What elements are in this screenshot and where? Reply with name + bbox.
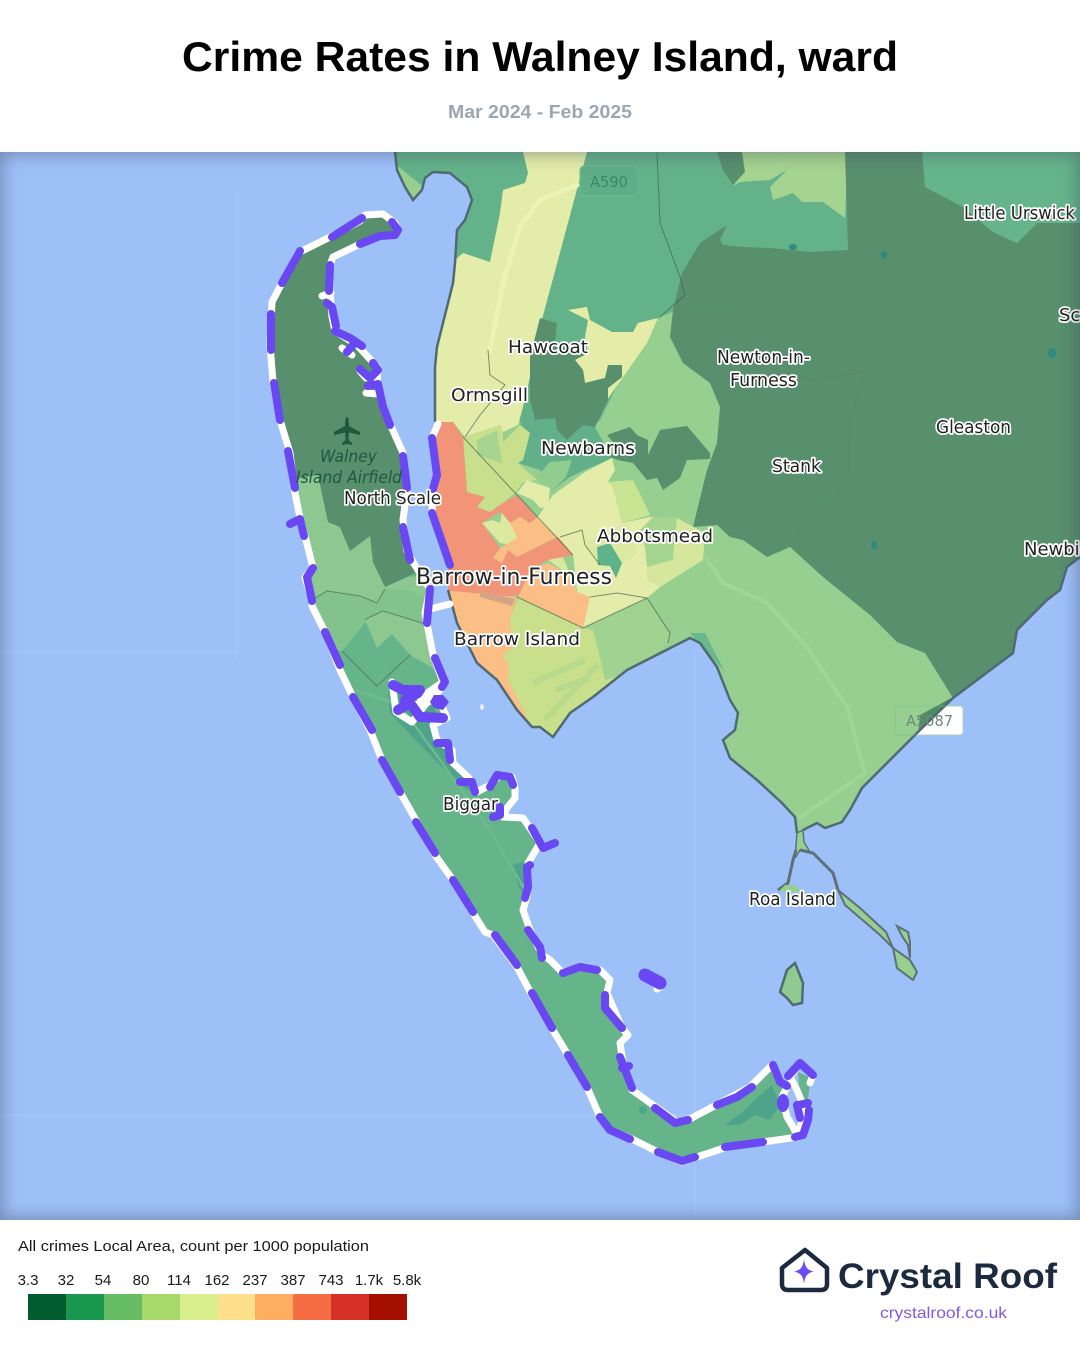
area: Hawcoat yellow xyxy=(568,307,658,400)
area: teal patch xyxy=(597,543,622,578)
logo icon: house with star xyxy=(782,1250,827,1290)
area: Hawcoat dark xyxy=(530,318,622,440)
title block xyxy=(182,33,898,122)
place labels: Ormsgill xyxy=(451,385,528,406)
place labels: Furness xyxy=(730,370,797,391)
ward lines inside Walney xyxy=(312,589,425,686)
small island north of Roanhead tip xyxy=(798,1072,811,1112)
footer xyxy=(18,1238,1058,1322)
Walney Island ward fill xyxy=(274,218,792,1156)
white dot in the channel xyxy=(480,704,484,710)
area: Rampside and south east xyxy=(398,166,1037,832)
teal shore patch xyxy=(690,633,725,672)
area: top right green xyxy=(920,152,1080,243)
place labels: Stank xyxy=(772,456,822,477)
area: lime block near teal xyxy=(583,523,637,565)
heading: Crime Rates in Walney Island, ward xyxy=(182,33,898,80)
legend scale numbers: 5.8k xyxy=(393,1272,422,1289)
area: south orange right xyxy=(518,563,590,628)
place labels: North Scale xyxy=(344,488,441,509)
legend scale numbers: 743 xyxy=(318,1272,344,1289)
airfield label: Island Airfield xyxy=(296,468,402,488)
place labels: Newbarns xyxy=(541,438,635,459)
water xyxy=(0,152,1080,1220)
area: Newbarns dark patches xyxy=(607,426,710,490)
dark region inner boundaries xyxy=(690,250,865,547)
area: light central Walney xyxy=(285,475,435,625)
area: Walney light block xyxy=(365,611,440,672)
park patch xyxy=(477,430,502,463)
area: south end teal settlement xyxy=(725,1085,780,1125)
date range: Mar 2024 - Feb 2025 xyxy=(448,101,632,122)
road sign A5087: A5087 xyxy=(906,712,953,730)
area: north Walney dark xyxy=(260,200,420,587)
legend scale numbers: 114 xyxy=(167,1272,191,1289)
place labels: Biggar xyxy=(443,794,499,815)
airfield label xyxy=(296,447,402,488)
area: lime block xyxy=(608,480,650,523)
ward boundary lines xyxy=(463,153,685,643)
area: Walney mid xyxy=(295,589,435,651)
place labels: Gleaston xyxy=(936,417,1011,438)
area: Barrow Island orange xyxy=(450,590,530,722)
legend scale numbers: 80 xyxy=(133,1272,149,1289)
area: Newbarns teal xyxy=(518,426,612,490)
area: Abbotsmead yellow xyxy=(537,458,680,628)
road sign A590 xyxy=(580,166,638,196)
mainland choropleth xyxy=(380,152,1080,852)
ward outline white xyxy=(270,214,813,1162)
legend scale numbers: 54 xyxy=(95,1272,111,1289)
place labels: Newton-in- xyxy=(717,347,810,368)
area: Newbarns light xyxy=(542,460,572,490)
legend scale numbers: 162 xyxy=(204,1272,230,1289)
coastline xyxy=(395,152,1080,833)
place labels xyxy=(344,203,1080,910)
logo wordmark: Crystal Roof xyxy=(838,1257,1057,1296)
area: top lime patches xyxy=(733,152,848,218)
area: light strip xyxy=(640,517,677,567)
legend scale numbers: 237 xyxy=(242,1272,268,1289)
area: dark wedge at coast xyxy=(918,698,951,730)
area: Central red xyxy=(430,422,573,600)
road sign A5087 backing xyxy=(895,706,963,735)
ward outline purple dashes xyxy=(271,218,813,1161)
area: central orange xyxy=(493,517,557,563)
area: top yellow block xyxy=(517,480,550,508)
place labels: Roa Island xyxy=(749,889,836,910)
legend scale numbers: 387 xyxy=(280,1272,306,1289)
ponds xyxy=(789,244,1056,549)
place labels: Abbotsmead xyxy=(597,526,713,547)
place labels: Barrow Island xyxy=(454,629,580,650)
area: top dark patch xyxy=(717,152,745,185)
area: Hindpool yellow block xyxy=(482,513,518,545)
area: Ormsgill yellow xyxy=(430,152,587,437)
website url: crystalroof.co.uk xyxy=(880,1305,1008,1322)
lime docks xyxy=(533,660,598,720)
legend scale numbers: 1.7k xyxy=(355,1272,384,1289)
area: dock light green xyxy=(583,598,670,680)
legend scale numbers: 32 xyxy=(58,1272,74,1289)
area: Barrow Island lime xyxy=(502,598,616,735)
area: teal shore xyxy=(388,690,478,795)
area: small lime xyxy=(548,557,577,592)
place labels: Barrow-in-Furness xyxy=(416,565,612,590)
legend scale numbers: 3.3 xyxy=(18,1272,38,1289)
Foulney island xyxy=(780,963,803,1005)
area: north green xyxy=(380,152,860,445)
Roa Island causeway xyxy=(778,830,917,980)
legend title: All crimes Local Area, count per 1000 population xyxy=(18,1238,369,1255)
road sign A5087 xyxy=(895,706,963,735)
legend colour swatches xyxy=(28,1294,407,1320)
road sign A590: A590 xyxy=(590,173,628,191)
icon: airfield plane xyxy=(334,417,360,445)
area: Ormsgill south lime xyxy=(463,425,537,512)
brown patch xyxy=(480,591,515,606)
place labels: Hawcoat xyxy=(508,337,588,358)
legend scale numbers xyxy=(18,1272,422,1289)
area: Gleaston dark xyxy=(670,152,1080,698)
airfield label: Walney xyxy=(320,447,378,467)
roads xyxy=(490,185,865,817)
area: south Walney xyxy=(260,200,820,1170)
map edge shading xyxy=(0,152,1080,1220)
road xyxy=(355,690,525,890)
area: east lime xyxy=(647,518,705,587)
map panel xyxy=(0,152,1080,1220)
